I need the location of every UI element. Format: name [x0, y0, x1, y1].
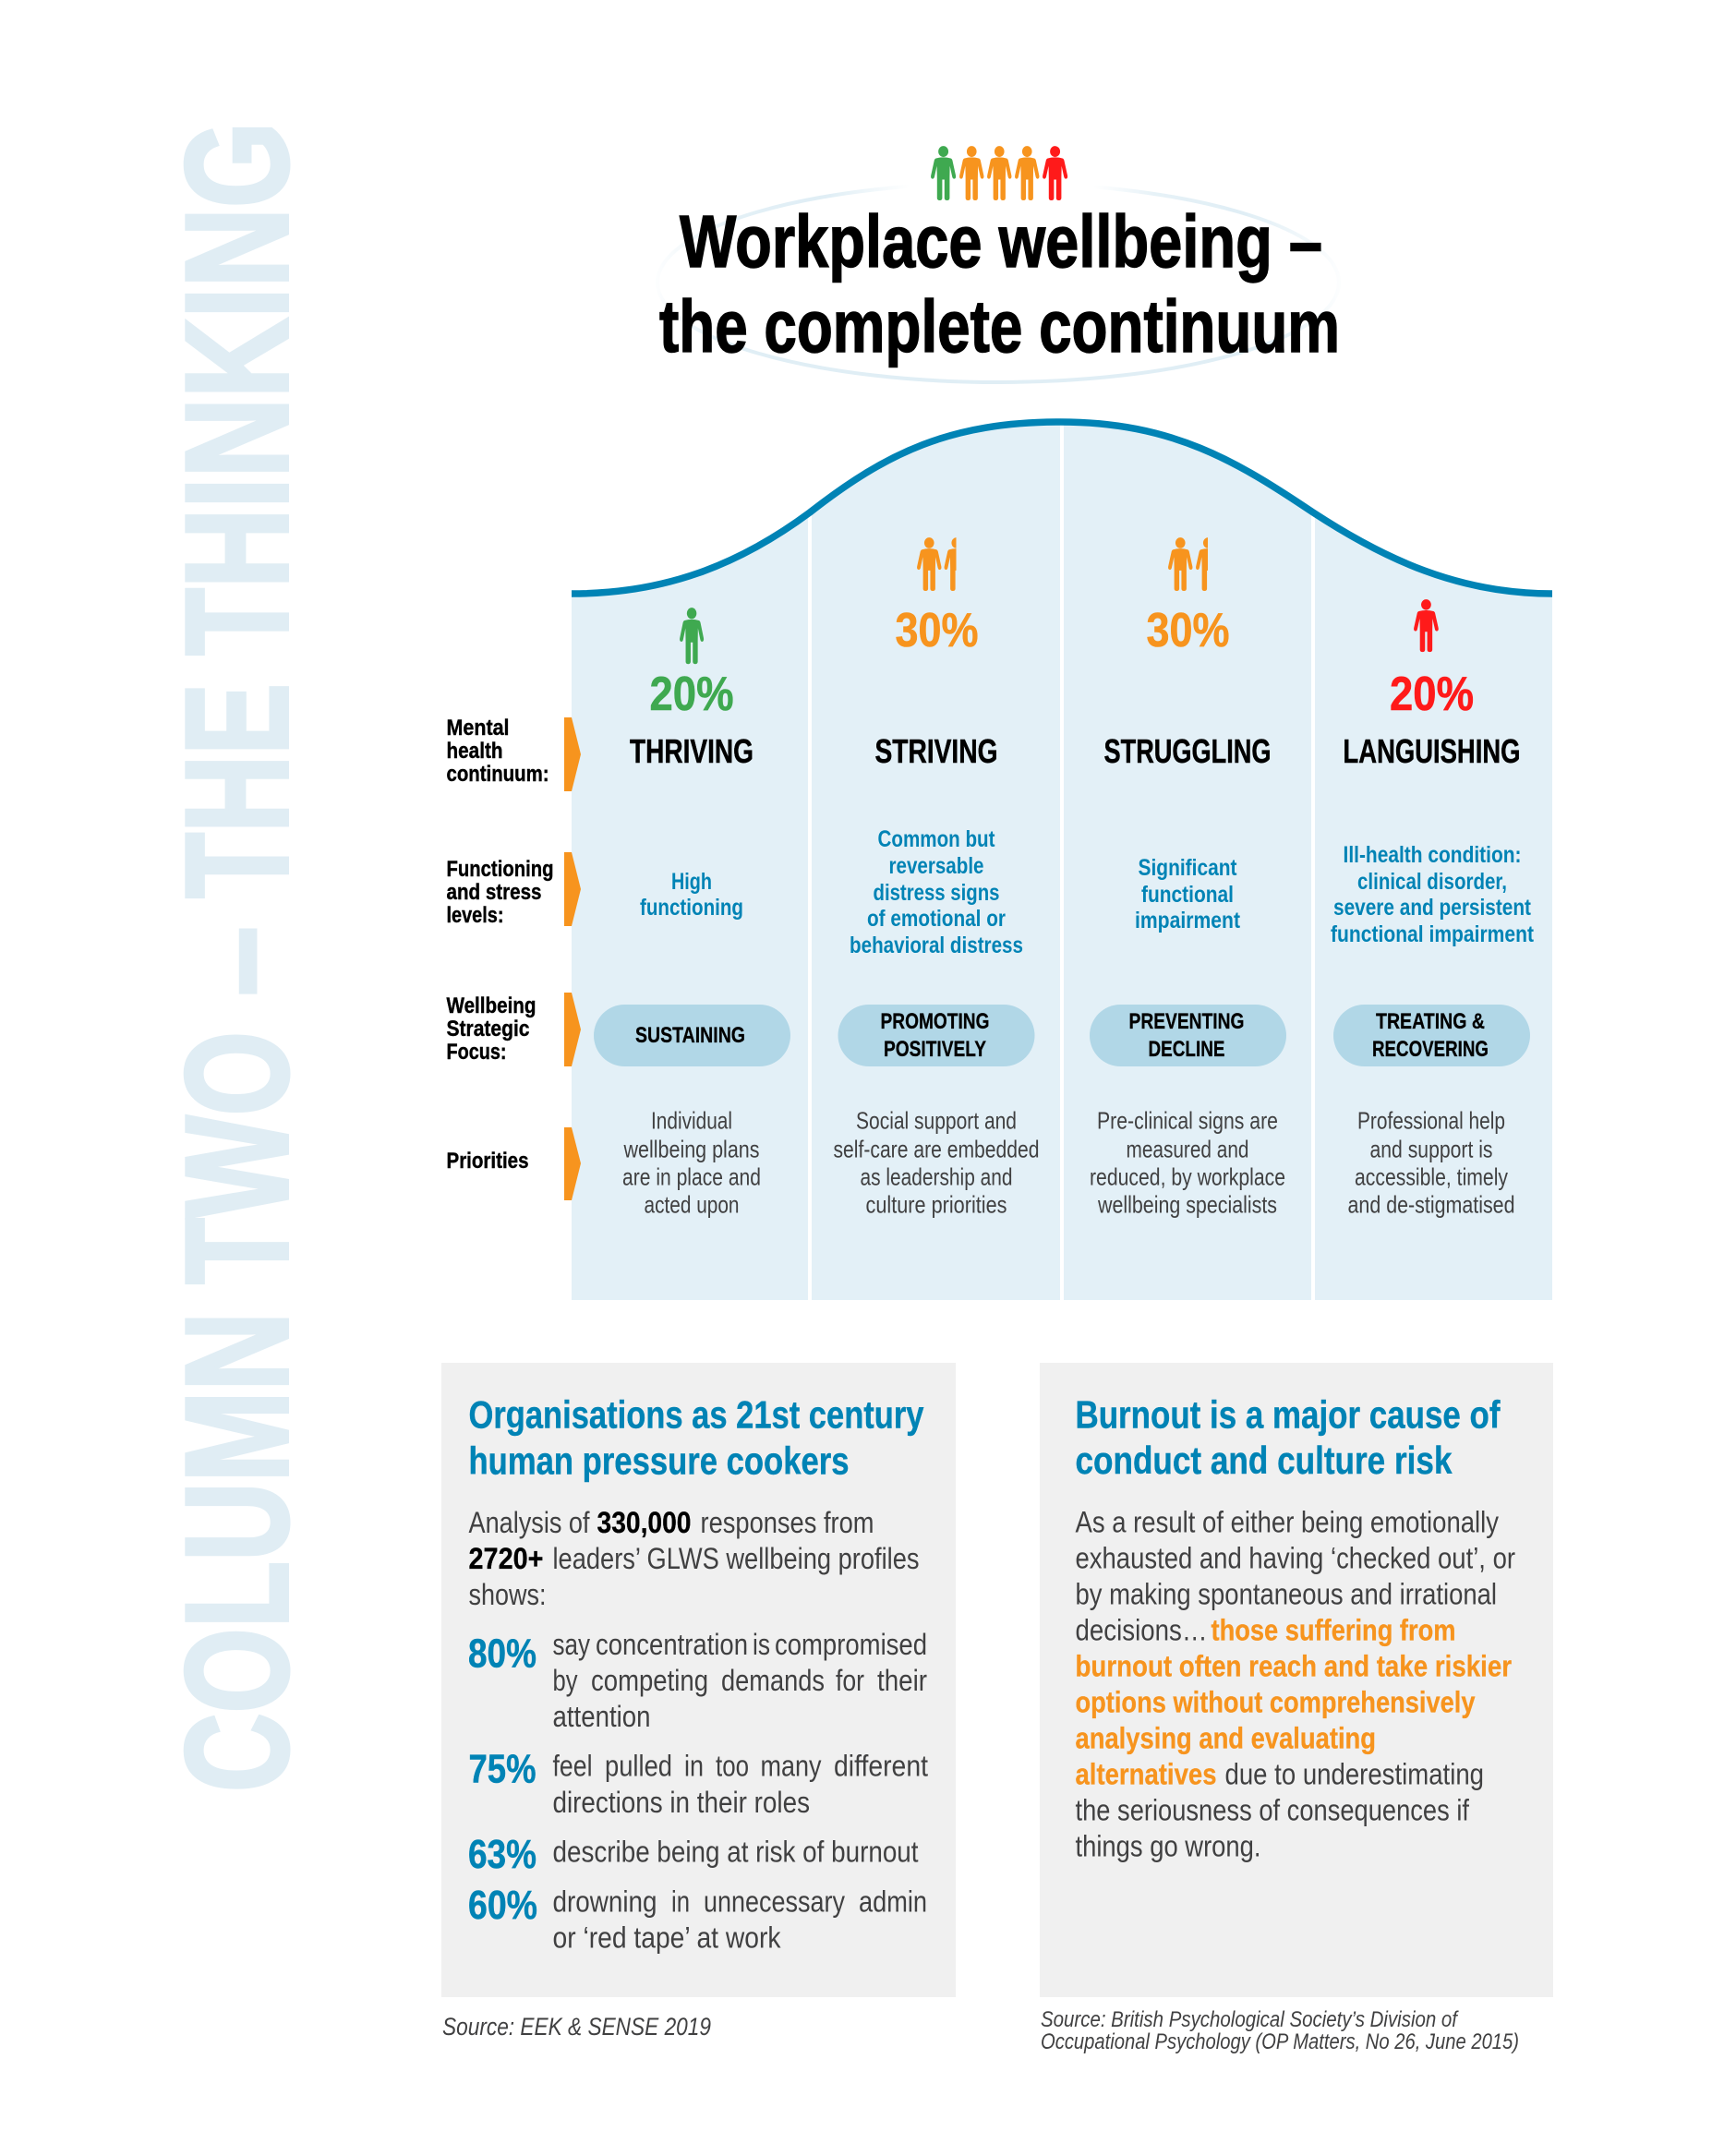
functioning text: Ill-health condition: — [1343, 842, 1522, 868]
stat 60 percent: in — [671, 1885, 690, 1919]
priorities text: reduced, by workplace — [1090, 1163, 1285, 1191]
panel body text: decisions… — [1075, 1614, 1208, 1647]
label: mental health continuum: continuum: — [447, 762, 549, 787]
priorities text — [622, 1106, 761, 1219]
panel heading: human pressure cookers — [469, 1439, 850, 1483]
icon: green person — [680, 608, 704, 664]
intro paragraph: shows: — [469, 1578, 547, 1611]
label: functioning and stress levels: and stress — [447, 880, 541, 905]
column: striving — [833, 537, 1040, 1219]
percentage 30: 30% — [1147, 604, 1230, 657]
stat 80 percent: say — [552, 1628, 590, 1661]
title text — [659, 200, 1340, 367]
priorities text: wellbeing plans — [623, 1136, 759, 1163]
priorities text: Social support and — [856, 1106, 1017, 1134]
panel body text: by making spontaneous and irrational — [1075, 1577, 1497, 1610]
priorities text: measured and — [1127, 1136, 1248, 1163]
stat 80 percent: is — [753, 1628, 770, 1661]
stat 63 percent: 63% — [468, 1832, 536, 1877]
source: British Psychological Society: Occupational Psychology (OP Matters, No 26, June 2015) — [1041, 2029, 1519, 2054]
functioning text: Common but — [877, 826, 995, 852]
functioning text — [640, 869, 743, 921]
functioning text: distress signs — [874, 880, 999, 906]
priorities text — [833, 1106, 1040, 1219]
title block — [657, 146, 1340, 382]
label: mental health continuum: health — [447, 739, 502, 764]
stat 75 percent: many — [761, 1749, 822, 1782]
label: wellbeing strategic focus: Wellbeing — [447, 993, 536, 1018]
label: functioning and stress levels: Functioning — [447, 857, 554, 882]
priorities text: Professional help — [1357, 1106, 1505, 1134]
intro paragraph: 330,000 — [597, 1506, 691, 1539]
functioning text: severe and persistent — [1333, 895, 1532, 921]
infographic — [183, 127, 1553, 2053]
stat 63 percent — [468, 1832, 919, 1877]
stat 60 percent: unnecessary — [704, 1885, 845, 1919]
percentage 30: 30% — [896, 604, 979, 657]
functioning text: functional impairment — [1331, 921, 1535, 947]
pill: treating and recovering — [1333, 1005, 1530, 1066]
functioning text: High — [671, 869, 712, 895]
label: wellbeing strategic focus: Focus: — [447, 1040, 506, 1065]
stat 80 percent: their — [877, 1664, 927, 1697]
panel body text: analysing and evaluating — [1075, 1721, 1376, 1754]
continuum curve panel — [572, 415, 1552, 1300]
priorities text — [1090, 1106, 1285, 1219]
stat 75 percent: pulled — [605, 1749, 672, 1782]
priorities text: Pre-clinical signs are — [1097, 1106, 1278, 1134]
functioning text — [1331, 842, 1535, 947]
functioning text: functional — [1141, 882, 1234, 908]
priorities text: as leadership and — [861, 1163, 1012, 1191]
stat 80 percent: 80% — [468, 1631, 536, 1677]
functioning text: impairment — [1135, 908, 1241, 933]
priorities text: and de-stigmatised — [1348, 1191, 1514, 1219]
stat 80 percent: compromised — [775, 1628, 927, 1661]
pill: promoting positively: POSITIVELY — [884, 1037, 986, 1062]
panel body text: alternatives — [1075, 1758, 1217, 1791]
priorities text: are in place and — [622, 1163, 761, 1191]
pill: promoting positively: PROMOTING — [881, 1009, 990, 1034]
functioning text: functioning — [640, 895, 743, 921]
priorities text — [1348, 1106, 1514, 1219]
icon: red person — [1414, 599, 1439, 652]
panel heading: Organisations as 21st century — [469, 1392, 924, 1437]
stat 80 percent: concentration — [596, 1628, 748, 1661]
stat 60 percent — [468, 1883, 927, 1954]
stat 80 percent — [468, 1628, 927, 1733]
source: EEK and SENSE: Source: EEK & SENSE 2019 — [442, 2013, 711, 2041]
title ellipse — [657, 183, 1339, 382]
priorities text: Individual — [651, 1106, 732, 1134]
priorities text: and support is — [1370, 1136, 1492, 1163]
panel heading — [469, 1392, 924, 1483]
intro paragraph: leaders’ GLWS wellbeing profiles — [552, 1542, 920, 1575]
stat 60 percent: admin — [859, 1885, 927, 1919]
panel body text: those suffering from — [1212, 1614, 1455, 1647]
functioning text: of emotional or — [867, 906, 1006, 932]
functioning text: behavioral distress — [850, 933, 1023, 958]
panel heading: conduct and culture risk — [1075, 1439, 1453, 1482]
row labels — [447, 716, 554, 1174]
icon: row of five people — [931, 146, 1067, 200]
pill: treating and recovering: TREATING & — [1376, 1009, 1485, 1034]
pill: preventing decline — [1090, 1005, 1286, 1066]
panel body text: the seriousness of consequences if — [1075, 1793, 1469, 1826]
functioning text — [850, 826, 1023, 958]
intro paragraph — [469, 1506, 920, 1611]
icon: orange people — [1168, 537, 1208, 591]
stat 75 percent: different — [834, 1749, 928, 1782]
panel heading — [1075, 1392, 1501, 1482]
bell curve line — [572, 422, 1552, 594]
source: British Psychological Society — [1041, 2007, 1519, 2054]
source: British Psychological Society: Source: British Psychological Society’s Division of — [1041, 2007, 1459, 2032]
panel background — [441, 1363, 956, 1997]
stat 80 percent: demands — [721, 1664, 825, 1697]
side heading: column two, the thinking: TWO — [156, 1031, 319, 1284]
pill: promoting positively — [838, 1005, 1034, 1066]
stat 75 percent: too — [716, 1749, 749, 1782]
priorities text: self-care are embedded — [833, 1136, 1040, 1163]
pill: sustaining — [594, 1005, 790, 1066]
column: thriving — [594, 608, 790, 1219]
stat 75 percent: feel — [552, 1749, 593, 1782]
panel body text: As a result of either being emotionally — [1075, 1505, 1499, 1538]
pill: preventing decline: PREVENTING — [1128, 1009, 1245, 1034]
title text: the complete continuum — [659, 285, 1340, 367]
intro paragraph: Analysis of — [469, 1506, 590, 1539]
stat 80 percent: competing — [591, 1664, 708, 1697]
state name: STRIVING — [875, 732, 997, 770]
priorities text: acted upon — [645, 1191, 739, 1219]
functioning text: clinical disorder, — [1357, 869, 1507, 895]
panel body text — [1075, 1505, 1515, 1863]
title text: Workplace wellbeing – — [680, 200, 1322, 283]
stat 63 percent: describe being at risk of burnout — [552, 1836, 919, 1869]
state name: STRUGGLING — [1104, 732, 1271, 770]
functioning text — [1135, 855, 1241, 933]
stat 60 percent: drowning — [552, 1885, 657, 1919]
label: mental health continuum — [447, 716, 549, 787]
side heading: column two, the thinking: – — [156, 926, 319, 996]
panel heading: Burnout is a major cause of — [1075, 1392, 1501, 1437]
panel: burnout — [1040, 1363, 1553, 1997]
pill: sustaining: SUSTAINING — [635, 1023, 745, 1048]
functioning text: reversable — [888, 853, 984, 879]
stat 75 percent: in — [684, 1749, 704, 1782]
state name: LANGUISHING — [1343, 732, 1520, 770]
icon: orange people — [917, 537, 957, 591]
label: wellbeing strategic focus: Strategic — [447, 1017, 530, 1041]
panel body text: due to underestimating — [1224, 1758, 1484, 1791]
intro paragraph: 2720+ — [469, 1542, 543, 1575]
side heading: column two, the thinking — [156, 122, 319, 1792]
column dividers — [808, 415, 1315, 1300]
functioning text: Significant — [1138, 855, 1237, 881]
priorities text: accessible, timely — [1355, 1163, 1508, 1191]
priorities text: culture priorities — [866, 1191, 1007, 1219]
orange row arrows — [564, 717, 581, 1200]
stat 75 percent — [469, 1747, 928, 1819]
label: functioning and stress levels: levels: — [447, 903, 504, 928]
intro paragraph: responses from — [700, 1506, 874, 1539]
stat 60 percent: 60% — [468, 1883, 537, 1928]
pill: preventing decline: DECLINE — [1149, 1037, 1224, 1062]
column: languishing — [1331, 599, 1535, 1219]
panel: pressure cookers — [441, 1363, 956, 1997]
stat 80 percent: by — [552, 1664, 578, 1697]
label: priorities: Priorities — [447, 1149, 528, 1174]
state name: THRIVING — [630, 732, 753, 770]
panel body text: burnout often reach and take riskier — [1075, 1649, 1512, 1682]
label: functioning and stress levels — [447, 857, 554, 928]
panel body text: things go wrong. — [1075, 1830, 1261, 1863]
panel body text: options without comprehensively — [1075, 1686, 1476, 1719]
bell curve background — [572, 422, 1552, 1300]
panel background — [1040, 1363, 1553, 1997]
label: mental health continuum: Mental — [447, 716, 510, 740]
side heading: column two, the thinking: COLUMN — [156, 1312, 319, 1792]
priorities text: wellbeing specialists — [1097, 1191, 1277, 1219]
panel body text: exhausted and having ‘checked out’, or — [1075, 1542, 1515, 1575]
label: wellbeing strategic focus — [447, 993, 536, 1065]
stat 80 percent: attention — [552, 1700, 650, 1733]
stat 60 percent: or ‘red tape’ at work — [552, 1920, 781, 1954]
stat 75 percent: 75% — [469, 1747, 536, 1791]
percentage 20: 20% — [650, 668, 733, 721]
percentage 20: 20% — [1390, 668, 1474, 721]
side heading: column two, the thinking: THE — [156, 683, 319, 898]
pill: treating and recovering: RECOVERING — [1372, 1037, 1489, 1062]
stat 80 percent: for — [836, 1664, 864, 1697]
stat 75 percent: directions in their roles — [552, 1786, 810, 1819]
column: struggling — [1090, 537, 1286, 1219]
